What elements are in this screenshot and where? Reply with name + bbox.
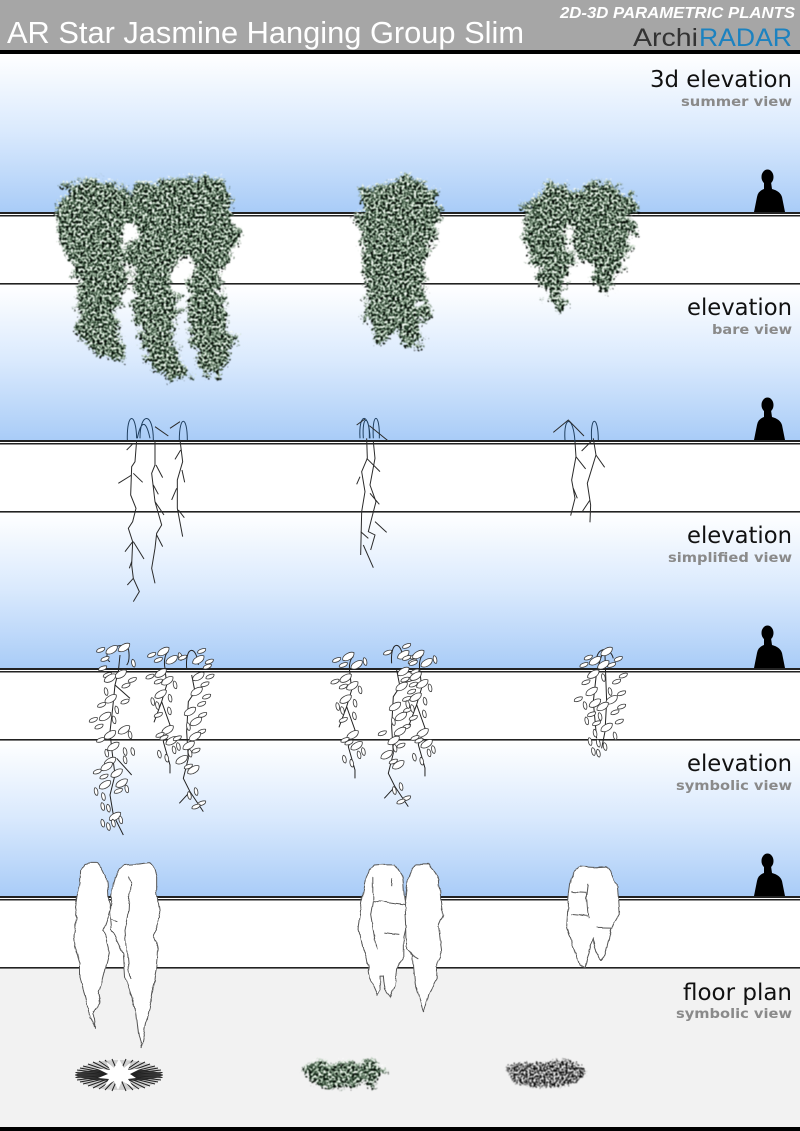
icon: person silhouette row 2 [754,398,785,440]
icon: person silhouette row 3 [754,626,785,668]
panel: floor plan ground [0,968,800,1127]
label: elevation symbolic view: elevation [687,751,792,777]
title: AR Star Jasmine Hanging Group Slim [7,15,524,50]
icon: person silhouette row 4 [754,854,785,896]
plant group 1: 3d foliage [60,180,240,378]
plant group 2: bare stems [357,418,388,568]
bottom bar [0,1127,800,1131]
label: elevation simplified view [668,523,792,566]
floor plan symbol: grey texture plan [506,1060,585,1086]
floor plan symbol: textured green plan [304,1060,383,1086]
label: elevation bare view: elevation [687,295,792,321]
label: elevation symbolic view: symbolic view [676,779,792,794]
panel: symbolic view sky [0,741,800,896]
plant group 3: symbolic leaves [574,647,627,757]
label: elevation bare view: bare view [712,323,792,338]
label: 3d elevation: summer view [681,95,792,110]
panel: bare view sky [0,285,800,440]
plant group 1: bare stems [118,419,187,602]
label: elevation simplified view: elevation [687,523,792,549]
label: elevation symbolic view [676,751,792,794]
icon: person silhouette row 1 [754,170,785,212]
plant group 3: 3d foliage [525,183,633,305]
plant group 2: symbolic leaves [331,644,437,807]
header band [0,0,800,54]
plant group 1: silhouette [74,863,160,1047]
plant group 2: 3d foliage [357,178,437,345]
logo [633,24,792,52]
logo: Archi [633,24,698,52]
label: floor plan symbolic view: floor plan [683,980,792,1006]
plant group 3: bare stems [553,420,605,522]
floor plan symbol: radial line plan [75,1059,163,1091]
panel: 3d elevation sky [0,54,800,212]
label: elevation simplified view: simplified view [668,551,792,566]
label: 3d elevation: 3d elevation [650,67,792,93]
panel: simplified view sky [0,513,800,668]
plant group 2: silhouette [358,864,443,1012]
plant group 1: symbolic leaves [89,643,214,835]
label: elevation bare view [687,295,792,338]
label: 3d elevation [650,67,792,110]
plant group 3: silhouette [567,867,619,968]
label: floor plan symbolic view: symbolic view [676,1007,792,1022]
header tagline: 2D-3D PARAMETRIC PLANTS [559,5,795,22]
label: floor plan symbolic view [676,980,792,1022]
logo: RADAR [699,24,792,52]
